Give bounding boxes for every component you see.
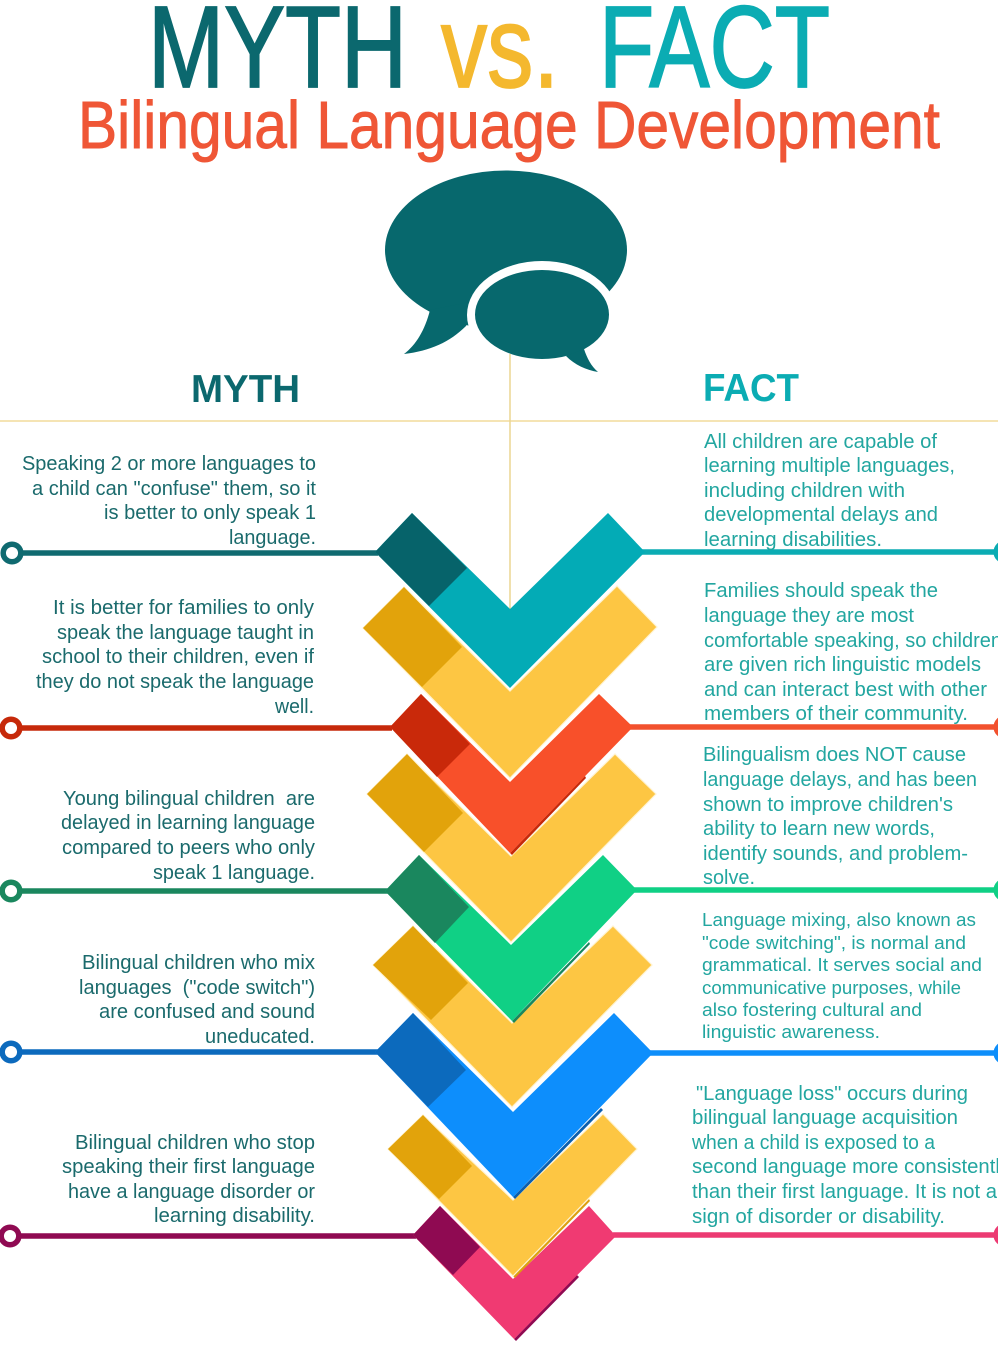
myth 5 text: Bilingual children who stop: [75, 1132, 315, 1154]
heading: myth column: MYTH: [191, 368, 300, 411]
myth 1 text: is better to only speak 1: [104, 502, 316, 524]
fact 5 text: when a child is exposed to a: [691, 1132, 936, 1154]
fact 3 text: language delays, and has been: [703, 769, 977, 791]
icon: speech bubbles: [385, 170, 627, 372]
myth 3 text: compared to peers who only: [62, 837, 315, 859]
chevron: yellow 3: [373, 926, 652, 1107]
fact 5 text: [691, 1083, 998, 1228]
fact 1 text: All children are capable of: [704, 431, 937, 453]
fact 4 text: linguistic awareness.: [702, 1021, 880, 1042]
chevron: pink: [413, 1206, 616, 1341]
myth 3 text: delayed in learning language: [61, 812, 315, 834]
fact 3 text: [703, 744, 977, 889]
myth 3 text: speak 1 language.: [153, 862, 315, 884]
myth 5 text: speaking their first language: [62, 1156, 315, 1178]
myth 5 text: learning disability.: [154, 1205, 315, 1227]
connector lines and end markers: [1, 543, 998, 1245]
fact 2 text: Families should speak the: [704, 580, 938, 602]
fact 2 text: language they are most: [704, 605, 914, 627]
fact 2 text: are given rich linguistic models: [704, 654, 981, 676]
chevron: green: [385, 855, 637, 1023]
fact 2 text: and can interact best with other: [704, 679, 987, 701]
fact 3 text: solve.: [703, 867, 755, 889]
fact 3 text: shown to improve children's: [703, 794, 953, 816]
fact 2 text: [704, 580, 998, 725]
fact 1 text: developmental delays and: [704, 504, 938, 526]
fact 2 text: members of their community.: [704, 703, 968, 725]
myth 5 text: have a language disorder or: [68, 1181, 315, 1203]
myth 4 text: uneducated.: [205, 1026, 315, 1048]
myth 2 text: speak the language taught in: [57, 622, 314, 644]
fact 1 text: learning disabilities.: [704, 529, 882, 551]
myth 1 text: Speaking 2 or more languages to: [22, 453, 316, 475]
myth 3 text: Young bilingual children are: [63, 788, 315, 810]
myth 1 text: language.: [229, 527, 316, 549]
fact 1 text: [704, 431, 955, 551]
fact 2 text: comfortable speaking, so children: [704, 630, 998, 652]
fact 3 text: ability to learn new words,: [703, 818, 935, 840]
myth 2 text: school to their children, even if: [42, 646, 314, 668]
myth 1 text: [22, 453, 316, 549]
chevron: red: [390, 694, 633, 855]
myth 4 text: Bilingual children who mix: [82, 952, 315, 974]
myth 4 text: are confused and sound: [99, 1001, 315, 1023]
myth 2 text: well.: [274, 696, 314, 718]
myth 3 text: [61, 788, 315, 884]
chevron: blue: [375, 1013, 653, 1199]
fact 5 text: second language more consistently: [692, 1156, 998, 1178]
heading: fact column: FACT: [703, 367, 799, 410]
fact 4 text: "code switching", is normal and: [702, 932, 966, 953]
myth 5 text: [62, 1132, 315, 1227]
fact 3 text: Bilingualism does NOT cause: [703, 744, 966, 766]
fact 4 text: grammatical. It serves social and: [702, 954, 982, 975]
fact 5 text: bilingual language acquisition: [692, 1107, 958, 1129]
chevron: yellow 4: [388, 1114, 637, 1278]
fact 5 text: "Language loss" occurs during: [696, 1083, 968, 1105]
myth 2 text: they do not speak the language: [36, 671, 314, 693]
myth 1 text: a child can "confuse" them, so it: [32, 478, 316, 500]
myth 4 text: [79, 952, 315, 1048]
chevron: teal: [375, 513, 645, 688]
fact 4 text: [702, 909, 982, 1042]
chevron: yellow 2: [367, 754, 656, 942]
title: [148, 0, 830, 112]
myth 2 text: It is better for families to only: [53, 597, 314, 619]
myth 4 text: languages ("code switch"): [79, 977, 315, 999]
fact 1 text: including children with: [704, 480, 905, 502]
fact 4 text: communicative purposes, while: [702, 977, 961, 998]
fact 5 text: than their first language. It is not a: [692, 1181, 998, 1203]
fact 3 text: identify sounds, and problem-: [703, 843, 968, 865]
myth 2 text: [36, 597, 314, 718]
chevron: yellow 1: [363, 586, 657, 778]
fact 4 text: also fostering cultural and: [702, 999, 922, 1020]
chevron stack: [363, 513, 657, 1341]
fact 1 text: learning multiple languages,: [704, 455, 955, 477]
fact 5 text: sign of disorder or disability.: [692, 1206, 945, 1228]
fact 4 text: Language mixing, also known as: [702, 909, 976, 930]
